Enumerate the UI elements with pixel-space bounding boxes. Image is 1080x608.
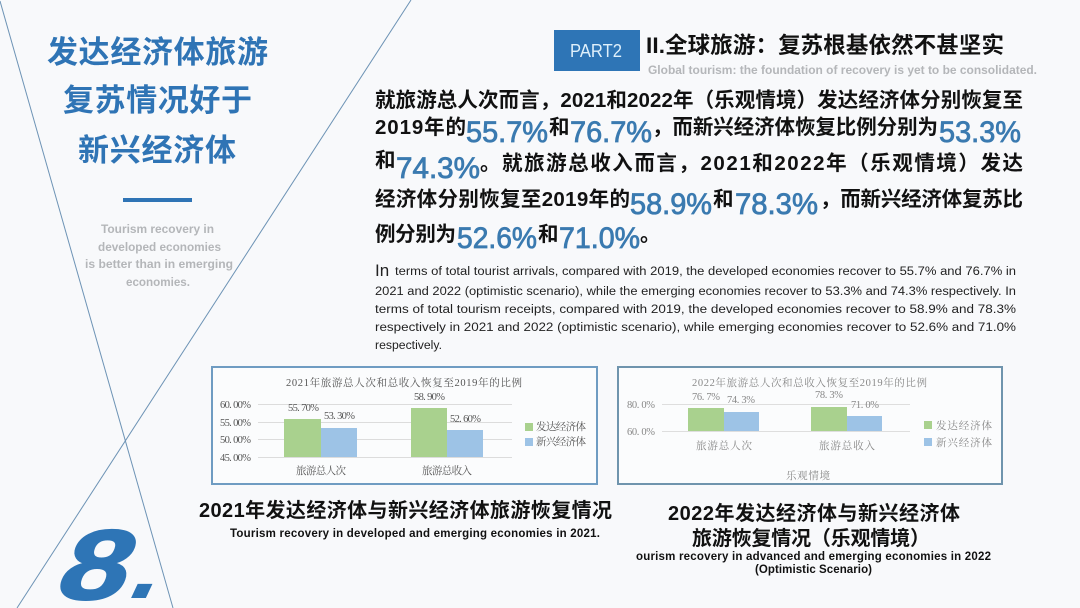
y axis labels: 80. 0% (627, 400, 655, 411)
caption: 2022 chart: 2022年发达经济体与新兴经济体 (668, 501, 960, 525)
data labels: 58. 90% (414, 392, 445, 403)
data labels: 74. 3% (727, 395, 755, 406)
category labels: 旅游总收入 (819, 439, 876, 452)
section tag: PART2: PART2 (570, 41, 622, 61)
text block: Chinese summary with highlighted figures: 53.3% (939, 116, 1021, 149)
text block: English summary: In (375, 261, 389, 280)
data labels: 52. 60% (450, 414, 481, 425)
heading: main title: 新兴经济体 (78, 133, 236, 168)
legend: 发达经济体 (536, 420, 586, 433)
caption: 2021 chart (199, 498, 612, 540)
text block: Chinese summary with highlighted figures: 2019年的 (375, 116, 466, 139)
heading: main title: 复苏情况好于 (63, 83, 252, 118)
text block: Chinese summary with highlighted figures: 71.0% (559, 222, 640, 255)
text block: Chinese summary with highlighted figures: 58.9% (630, 188, 712, 221)
text block: Chinese summary with highlighted figures: 78.3% (735, 188, 818, 221)
text block: English summary (375, 261, 1016, 352)
chart title: 2021年旅游总人次和总收入恢复至2019年的比例 (286, 376, 522, 389)
text block: English summary: respectively. (375, 340, 442, 352)
legend (924, 419, 992, 449)
text block: Chinese summary with highlighted figures: 和 (375, 149, 396, 172)
section subtitle: Global tourism: the foundation of recovery is yet to be consolidated. (648, 63, 1037, 77)
category labels: 旅游总收入 (422, 464, 472, 477)
text block: English subtitle: developed economies (98, 242, 221, 254)
text block: Chinese summary with highlighted figures: 52.6% (457, 222, 537, 255)
section tag: PART2 (554, 30, 640, 71)
bars (284, 408, 483, 457)
text block: English subtitle: Tourism recovery in (101, 224, 214, 236)
caption: 2022 chart: ourism recovery in advanced and emerging economies in 2022 (636, 551, 991, 563)
category labels (296, 464, 472, 477)
y axis labels: 60. 00% (220, 400, 251, 411)
category labels: 乐观情境 (786, 469, 830, 482)
caption: 2021 chart: Tourism recovery in developed and emerging economies in 2021. (230, 528, 600, 540)
text block: Chinese summary with highlighted figures: 和 (538, 223, 558, 246)
text block: English subtitle: is better than in emerging (85, 259, 233, 271)
caption: 2022 chart: (Optimistic Scenario) (755, 564, 872, 576)
text block: Chinese summary with highlighted figures: ，而新兴经济体恢复比例分别为 (652, 115, 938, 139)
text block: Chinese summary with highlighted figures: 76.7% (570, 116, 652, 149)
text block: Chinese summary with highlighted figures: 。 (640, 223, 660, 246)
text block: Chinese summary with highlighted figures (375, 88, 1023, 255)
chart: 2021 recovery bar chart (212, 367, 597, 484)
chart: 2022 recovery bar chart (618, 367, 1002, 484)
text block: Chinese summary with highlighted figures: 和 (713, 188, 734, 211)
data labels (692, 390, 879, 411)
accent rule (123, 198, 192, 202)
category labels (696, 439, 876, 482)
y axis labels (627, 400, 655, 438)
text block: English summary: respectively in 2021 and 2022 (optimistic scenario), while emerging economies recover to 52.6% and 71.0% (375, 322, 1016, 334)
data labels: 71. 0% (851, 400, 879, 411)
legend (525, 420, 586, 448)
category labels: 旅游总人次 (696, 439, 752, 452)
bars (688, 407, 882, 431)
legend: 新兴经济体 (936, 436, 992, 449)
text block: English subtitle (85, 224, 233, 289)
y axis labels: 55. 00% (220, 418, 251, 429)
chart title: 2022年旅游总人次和总收入恢复至2019年的比例 (692, 376, 927, 389)
text block: Chinese summary with highlighted figures: 55.7% (466, 116, 548, 149)
text block: Chinese summary with highlighted figures: 。就旅游总收入而言，2021和2022年（乐观情境）发达 (480, 151, 1023, 175)
y axis labels: 60. 0% (627, 427, 655, 438)
y axis labels: 45. 00% (220, 453, 251, 464)
data labels: 76. 7% (692, 392, 720, 403)
data labels: 78. 3% (815, 390, 843, 401)
caption: 2022 chart (636, 501, 991, 576)
text block: Chinese summary with highlighted figures: 74.3% (396, 152, 480, 185)
data labels: 55. 70% (288, 403, 319, 414)
text block: English subtitle: economies. (126, 277, 190, 289)
data labels: 53. 30% (324, 411, 355, 422)
data labels (288, 392, 481, 425)
heading: main title: 发达经济体旅游 (47, 35, 268, 70)
text block: English summary: terms of total tourist arrivals, compared with 2019, the developed economies recover to 55.7% and 76.7% in (395, 266, 1016, 278)
text block: Chinese summary with highlighted figures: 就旅游总人次而言，2021和2022年（乐观情境）发达经济体分别恢复至 (375, 88, 1023, 112)
caption: 2021 chart: 2021年发达经济体与新兴经济体旅游恢复情况 (199, 498, 612, 522)
text block: Chinese summary with highlighted figures: 和 (549, 116, 570, 139)
y axis labels: 50. 00% (220, 435, 251, 446)
heading: main title (47, 35, 268, 168)
text block: Chinese summary with highlighted figures: ，而新兴经济体复苏比 (820, 187, 1023, 211)
panel: left title column (47, 35, 268, 289)
legend: 发达经济体 (936, 419, 992, 432)
text block: Chinese summary with highlighted figures: 经济体分别恢复至2019年的 (375, 187, 630, 211)
heading: section title: II.全球旅游：复苏根基依然不甚坚实 (646, 32, 1004, 58)
legend: 新兴经济体 (536, 435, 586, 448)
category labels: 旅游总人次 (296, 464, 346, 477)
text block: English summary: 2021 and 2022 (optimistic scenario), while the emerging economies recover to 53.3% and 74.3% respectively. In (375, 286, 1016, 298)
text block: English summary: terms of total tourism receipts, compared with 2019, the developed economies recover to 58.9% and 78.3% (375, 304, 1016, 316)
text block: Chinese summary with highlighted figures: 例分别为 (375, 223, 456, 246)
caption: 2022 chart: 旅游恢复情况（乐观情境） (692, 526, 930, 550)
y axis labels (220, 400, 251, 464)
